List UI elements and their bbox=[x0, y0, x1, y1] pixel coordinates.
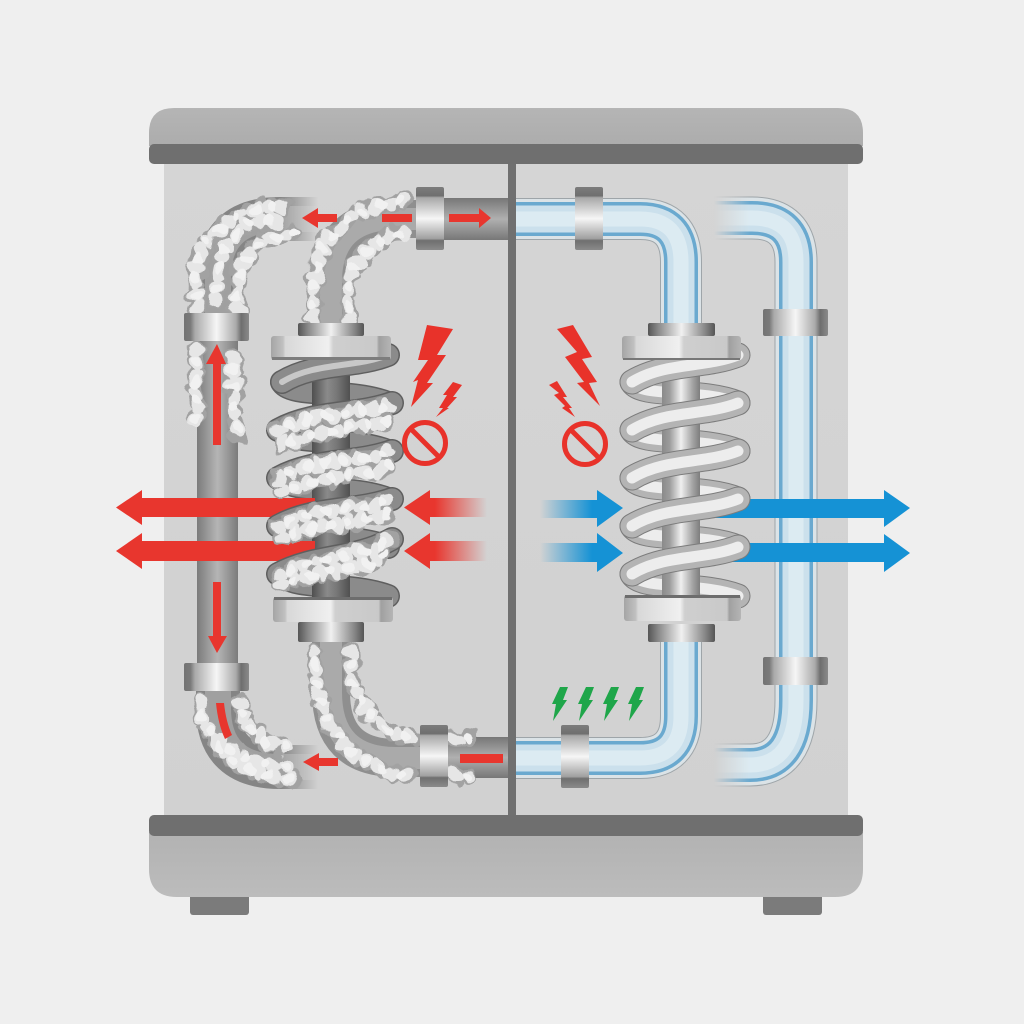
icon: prohibition sign, left bbox=[404, 422, 446, 464]
top cap bbox=[149, 108, 863, 164]
fouled pipe: coil inlet and outlet bbox=[331, 198, 508, 778]
icon: large and small red lightning, left bbox=[411, 325, 462, 417]
icon: green lightning bolts bbox=[552, 687, 644, 721]
red flow arrows in fouled pipes bbox=[206, 208, 503, 771]
hot air arrow: lower inflow bbox=[404, 533, 487, 569]
mineral scale deposits on coil bbox=[278, 403, 392, 586]
left coil lower front strands under deposits bbox=[278, 403, 392, 574]
left coil back strands bbox=[282, 382, 388, 596]
hot air arrow: upper left outflow bbox=[116, 490, 315, 525]
clean water pipe: coil inlet and outlet bbox=[516, 219, 681, 758]
cool air arrow: upper right outflow bbox=[715, 490, 910, 527]
center divider bbox=[508, 164, 516, 815]
icon: large and small red lightning, right bbox=[549, 325, 600, 417]
right spring top flange bbox=[622, 323, 741, 360]
right coil central rod bbox=[662, 358, 700, 600]
cool air arrow: upper inflow bbox=[540, 490, 623, 527]
icon: prohibition sign, right bbox=[564, 424, 606, 464]
mineral scale deposits on left pipes bbox=[195, 198, 470, 780]
right spring bottom flange bbox=[624, 595, 741, 642]
right coil back strands bbox=[632, 382, 738, 596]
base with feet bbox=[149, 815, 863, 915]
hot air arrow: upper inflow bbox=[404, 490, 487, 525]
collars on clean pipes bbox=[561, 187, 828, 788]
right coil front strands bbox=[632, 355, 738, 574]
unit cabinet body bbox=[164, 160, 848, 820]
clean water pipe: outer right loop bbox=[714, 218, 796, 765]
cool air arrow: lower right outflow bbox=[715, 534, 910, 572]
left coil central rod bbox=[312, 358, 350, 600]
left coil front strand bbox=[282, 355, 388, 382]
cool air arrow: lower inflow bbox=[540, 533, 623, 572]
collars on fouled pipes bbox=[184, 187, 448, 787]
hot air arrow: lower left outflow bbox=[116, 533, 315, 569]
left spring bottom flange bbox=[273, 597, 393, 642]
fouled pipe: outer left loop bbox=[197, 219, 320, 767]
left spring top flange bbox=[271, 323, 391, 360]
